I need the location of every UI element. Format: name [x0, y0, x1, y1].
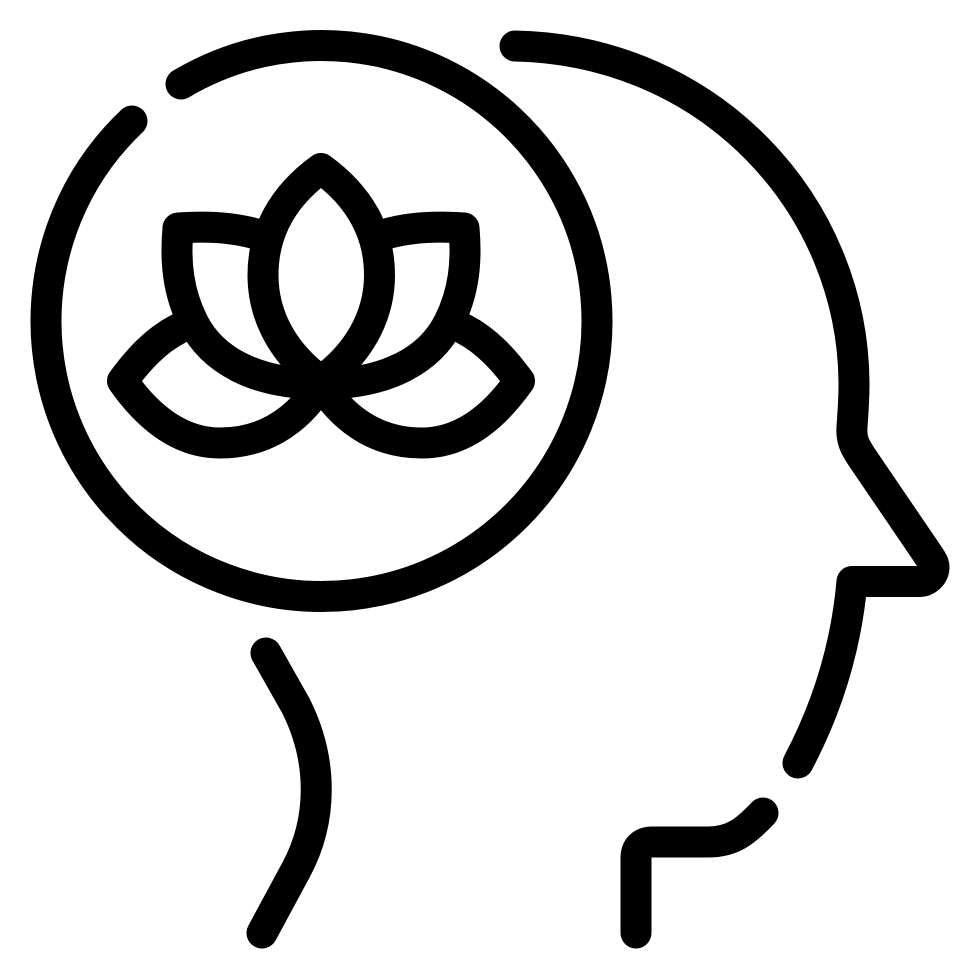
left upper petal [177, 227, 321, 384]
neck back [262, 653, 316, 933]
lotus flower [122, 168, 520, 443]
centre petal [263, 168, 380, 381]
circle around lotus [46, 45, 597, 596]
left lower petal [122, 329, 321, 443]
right upper petal [321, 227, 465, 384]
head outline: crown, forehead and nose [515, 46, 934, 763]
chin and jaw [636, 813, 763, 933]
right lower petal [321, 329, 520, 443]
